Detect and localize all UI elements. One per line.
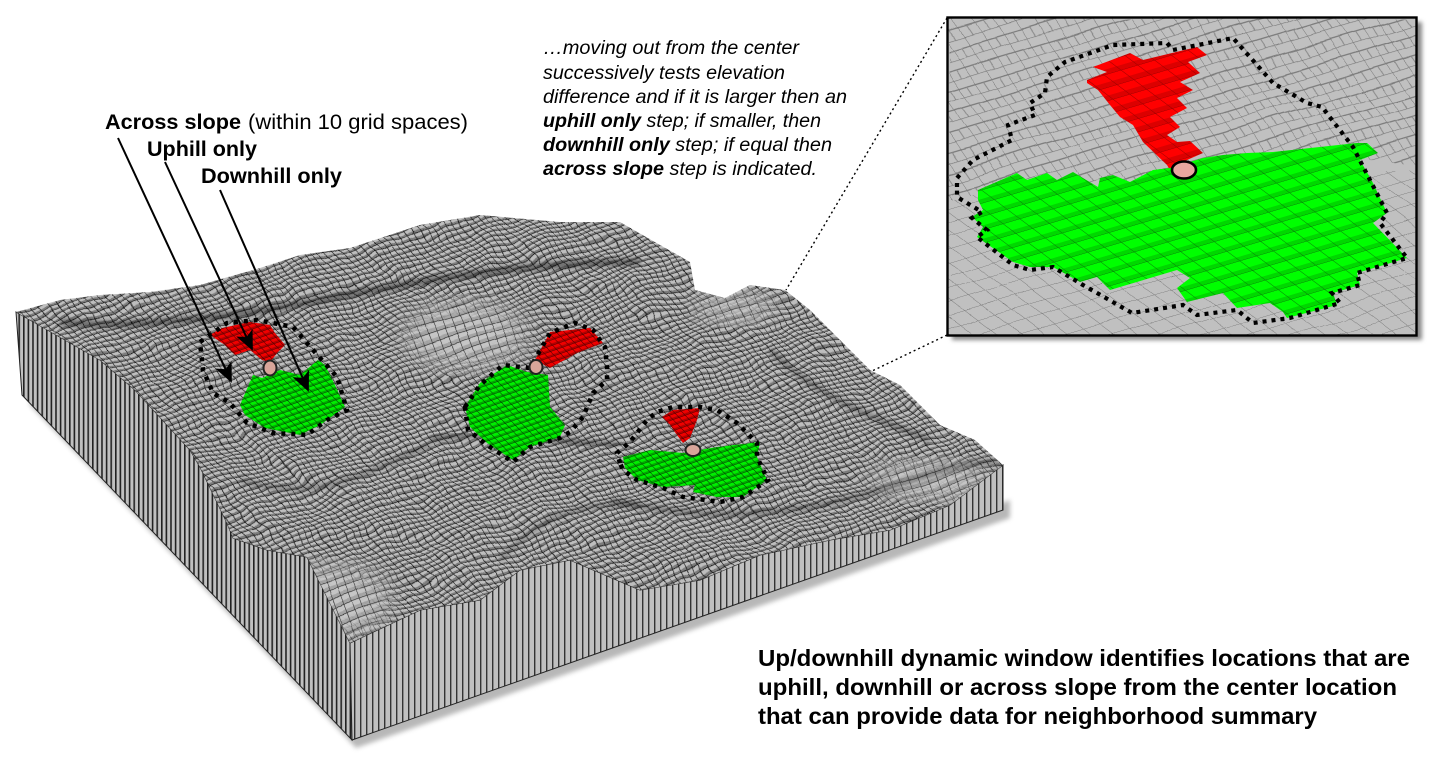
- label: uphill only: Uphill only: [147, 138, 257, 161]
- explanatory note: across slope step is indicated.: [543, 159, 817, 180]
- summary caption: that can provide data for neighborhood summary: [758, 703, 1317, 729]
- explanatory note: uphill only step; if smaller, then: [543, 111, 821, 132]
- front wall of terrain block: [350, 465, 1003, 740]
- summary caption: uphill, downhill or across slope from the center location: [758, 674, 1397, 700]
- dotted window boundary 2: [465, 323, 607, 462]
- terrain surface mesh: [16, 215, 1003, 643]
- across slope cells 2: [465, 365, 565, 460]
- window 2: [465, 323, 607, 462]
- center location 1: [264, 360, 276, 376]
- across slope cells 1: [240, 360, 345, 435]
- uphill cells 2: [535, 328, 603, 368]
- left wall of terrain block: [16, 312, 352, 740]
- terrain block diagram: [0, 190, 1040, 748]
- leader lines to inset: [786, 18, 947, 372]
- label: across slope: Across slope: [105, 111, 241, 134]
- inset terrain: [948, 18, 1416, 334]
- window 3: [617, 407, 768, 502]
- terrain drop shadow: [30, 385, 1010, 748]
- uphill cells 1: [210, 322, 285, 362]
- center location 2: [530, 360, 542, 374]
- dotted window boundary 3: [617, 407, 768, 502]
- inset: zoomed window: [930, 18, 1440, 355]
- summary caption: Up/downhill dynamic window identifies locations that are: [758, 645, 1410, 671]
- label: downhill only: Downhill only: [201, 165, 342, 188]
- inset shadow: [952, 22, 1422, 340]
- inset uphill cells: [1087, 47, 1207, 170]
- explanatory note: successively tests elevation: [543, 63, 785, 84]
- explanatory note: [543, 38, 847, 180]
- across slope cells 3: [623, 442, 767, 497]
- arrow: downhill only: [220, 190, 308, 390]
- dotted window boundary 1: [200, 320, 347, 435]
- uphill cells 3: [662, 408, 700, 443]
- inset center location: [1172, 162, 1196, 178]
- window 1: [200, 320, 347, 435]
- arrow: uphill only: [165, 162, 252, 349]
- arrow: across slope: [118, 138, 231, 381]
- arrow labels: [105, 111, 468, 188]
- inset frame: [948, 18, 1416, 336]
- explanatory note: difference and if it is larger then an: [543, 87, 847, 108]
- inset across slope cells: [972, 143, 1407, 318]
- inset dotted window boundary: [957, 38, 1407, 323]
- summary caption: [758, 645, 1410, 729]
- explanatory note: …moving out from the center: [543, 38, 800, 59]
- explanatory note: downhill only step; if equal then: [543, 135, 832, 156]
- center location 3: [686, 444, 700, 456]
- label: within 10 grid spaces: (within 10 grid spaces): [248, 111, 468, 134]
